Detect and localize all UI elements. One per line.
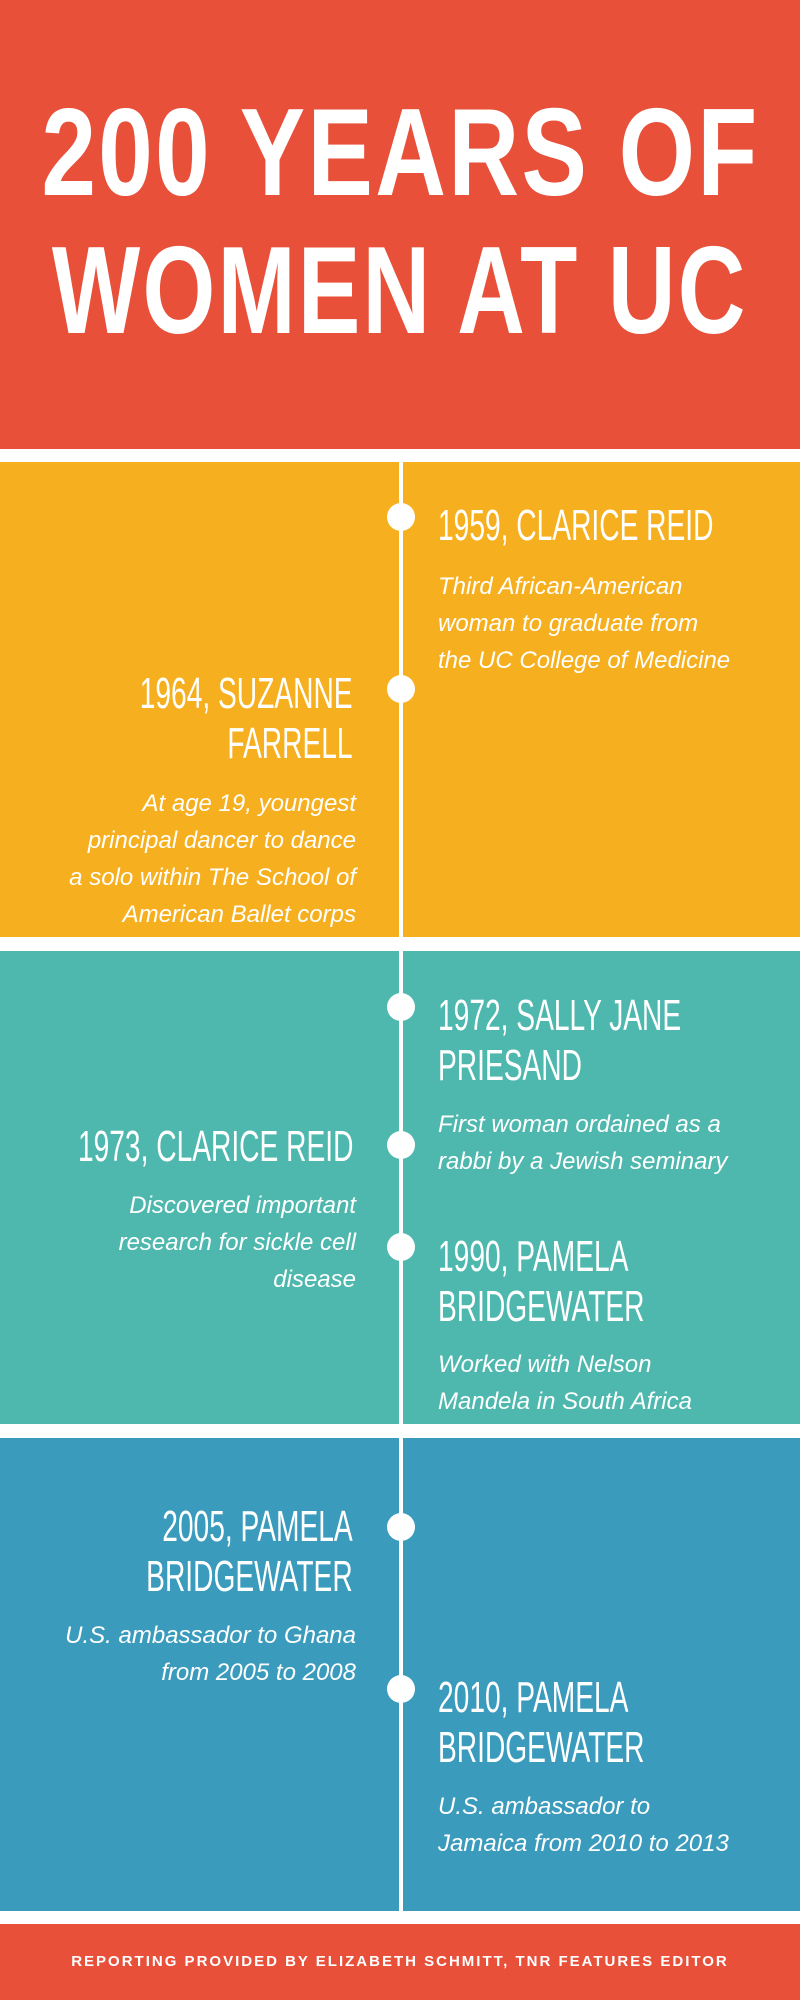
- heading 2005: 2005, PAMELA: [163, 1502, 353, 1551]
- heading 1990: BRIDGEWATER: [438, 1282, 645, 1331]
- heading 1972: PRIESAND: [438, 1041, 582, 1090]
- text 1964: [69, 790, 358, 928]
- text 1973: disease: [273, 1266, 356, 1293]
- panel: teal 1972-1990: [0, 951, 800, 1424]
- icon: dot 1972: [387, 993, 415, 1021]
- panel: blue 2005-2010: [0, 1438, 800, 1911]
- title: [41, 84, 759, 360]
- text 1973: Discovered important: [129, 1192, 356, 1219]
- heading 2010: BRIDGEWATER: [438, 1723, 645, 1772]
- text 1972: rabbi by a Jewish seminary: [438, 1148, 727, 1175]
- header band: [0, 0, 800, 449]
- text 1964: a solo within The School of: [69, 864, 356, 891]
- text 2005: U.S. ambassador to Ghana: [65, 1622, 356, 1649]
- text 1959: Third African-American: [438, 573, 683, 600]
- text 1964: At age 19, youngest: [142, 790, 356, 817]
- icon: dot 1964: [387, 675, 415, 703]
- heading 2005: BRIDGEWATER: [146, 1552, 353, 1601]
- heading 1964: [140, 669, 353, 768]
- text 1973: research for sickle cell: [119, 1229, 356, 1256]
- footer band: [0, 1924, 800, 2000]
- icon: dot 1973: [387, 1131, 415, 1159]
- heading 2005: [146, 1502, 353, 1601]
- text 1959: woman to graduate from: [438, 610, 698, 637]
- title: WOMEN AT UC: [52, 222, 748, 360]
- text 1964: principal dancer to dance: [88, 827, 356, 854]
- icon: dot 1990: [387, 1233, 415, 1261]
- heading 1973: 1973, CLARICE REID: [78, 1122, 353, 1171]
- icon: dot 2010: [387, 1675, 415, 1703]
- text 2010: U.S. ambassador to: [438, 1793, 650, 1820]
- text 2005: from 2005 to 2008: [161, 1659, 356, 1686]
- heading 1964: FARRELL: [228, 719, 353, 768]
- text 1990: Worked with Nelson: [438, 1351, 651, 1378]
- text 1964: American Ballet corps: [123, 901, 356, 928]
- text 2010: [438, 1793, 729, 1857]
- text 2005: [65, 1622, 356, 1686]
- text 1990: [438, 1351, 692, 1415]
- heading 1972: 1972, SALLY JANE: [438, 991, 681, 1040]
- text 1972: [438, 1111, 729, 1175]
- panel: yellow 1959-1964: [0, 462, 800, 937]
- text 1972: First woman ordained as a: [438, 1111, 721, 1138]
- heading 1990: 1990, PAMELA: [438, 1232, 628, 1281]
- title: 200 YEARS OF: [41, 84, 759, 222]
- heading 1990: [438, 1232, 645, 1331]
- icon: dot 1959: [387, 503, 415, 531]
- text 1959: the UC College of Medicine: [438, 647, 730, 674]
- heading 1964: 1964, SUZANNE: [140, 669, 353, 718]
- text 1990: Mandela in South Africa: [438, 1388, 692, 1415]
- icon: dot 2005: [387, 1513, 415, 1541]
- heading 2010: 2010, PAMELA: [438, 1673, 628, 1722]
- text 2010: Jamaica from 2010 to 2013: [438, 1830, 729, 1857]
- footer credit: REPORTING PROVIDED BY ELIZABETH SCHMITT, TNR FEATURES EDITOR: [71, 1953, 729, 1970]
- text 1973: [119, 1192, 357, 1293]
- heading 1972: [438, 991, 681, 1090]
- text 1959: [438, 573, 730, 674]
- heading 1959: 1959, CLARICE REID: [438, 501, 713, 550]
- heading 2010: [438, 1673, 645, 1772]
